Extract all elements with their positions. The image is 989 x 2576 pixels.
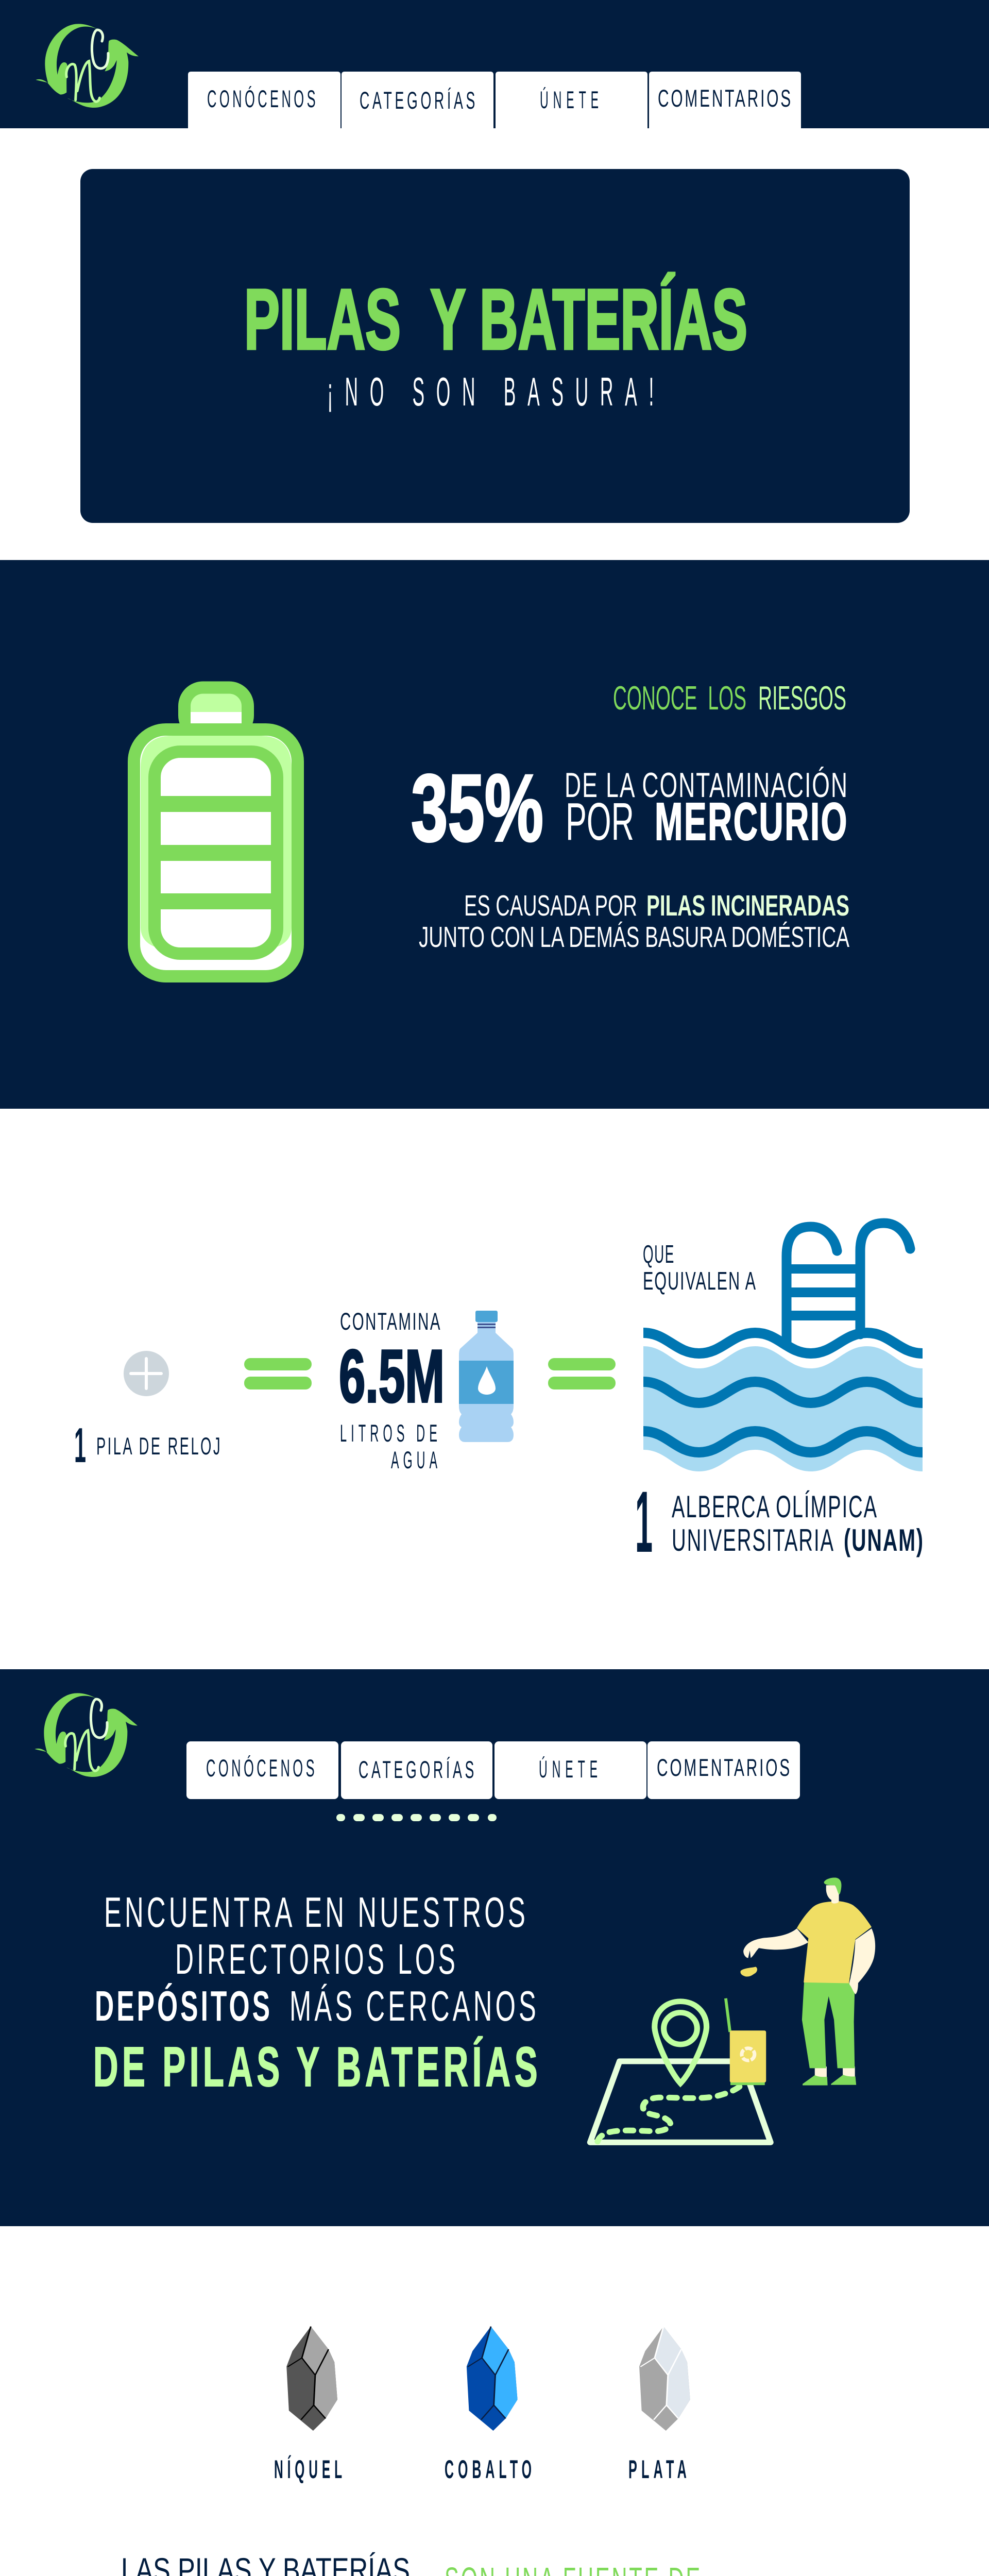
- icon: logo with recycling arrows: [36, 24, 139, 108]
- icon: watch battery: [124, 1351, 169, 1396]
- panel: hero title: [80, 169, 910, 523]
- text: que equivalen a: EQUIVALEN A: [643, 1267, 757, 1295]
- panel: equivalence: [74, 1223, 924, 1570]
- recycling bin: [726, 1998, 766, 2085]
- icon: silver crystal: [639, 2327, 690, 2431]
- text: pilas incineradas: PILAS INCINERADAS: [646, 889, 849, 922]
- text: encuentra depósitos: ENCUENTRA EN NUESTROS: [104, 1888, 528, 1936]
- panel: directory: [0, 1669, 989, 2226]
- label: 1 alberca olímpica: (UNAM): [844, 1523, 924, 1557]
- text: encuentra depósitos: DIRECTORIOS LOS: [175, 1935, 458, 1983]
- stat: 35 percent: 35%: [411, 755, 543, 861]
- materials row: [274, 2327, 691, 2484]
- text: encuentra depósitos: MÁS CERCANOS: [289, 1982, 539, 2030]
- navigation tabs: [188, 72, 801, 128]
- label: 1 pila de reloj: 1: [74, 1418, 86, 1473]
- materials row: COBALTO: [445, 2455, 536, 2484]
- stat: 6.5M litros: AGUA: [391, 1446, 441, 1473]
- icon: logo: [35, 1693, 138, 1777]
- label: 1 alberca olímpica: ALBERCA OLÍMPICA: [672, 1489, 878, 1524]
- label: 1 pila de reloj: [74, 1418, 222, 1473]
- heading: conoce los riesgos: CONOCE LOS: [613, 679, 746, 717]
- illustration: person recycling over map: [590, 1877, 875, 2142]
- label: plata: PLATA: [628, 2455, 691, 2484]
- label: 1 alberca olímpica: UNIVERSITARIA: [672, 1523, 834, 1557]
- equals sign: [244, 1358, 312, 1389]
- route: [598, 2084, 743, 2142]
- heading: conoce los riesgos: RIESGOS: [758, 679, 846, 717]
- person: [740, 1877, 875, 2086]
- location pin: [655, 2002, 707, 2083]
- panel: risks: [0, 560, 989, 1109]
- materials row: NÍQUEL: [274, 2455, 346, 2484]
- stat: 35 percent: [411, 755, 848, 861]
- icon: water bottle: [459, 1311, 514, 1442]
- panel: top header: [0, 0, 989, 128]
- text: encuentra depósitos: DE PILAS Y BATERÍAS: [93, 2036, 541, 2098]
- equals sign: [548, 1358, 616, 1389]
- icon: battery: [134, 687, 298, 976]
- map: [590, 2061, 771, 2142]
- stat: 35 percent: DE LA CONTAMINACIÓN: [565, 766, 848, 805]
- icon: nickel crystal: [286, 2327, 337, 2431]
- stat: 6.5M litros: CONTAMINA: [340, 1308, 441, 1335]
- label: 1 pila de reloj: PILA DE RELOJ: [96, 1432, 222, 1460]
- stat: 6.5M litros: 6.5M: [339, 1334, 445, 1418]
- text: encuentra depósitos: [93, 1888, 541, 2098]
- stat: 6.5M litros: LITROS DE: [340, 1419, 441, 1447]
- label: 1 alberca olímpica: [635, 1473, 924, 1570]
- navigation buttons: [186, 1741, 800, 1799]
- text: que equivalen a: QUE: [643, 1241, 675, 1268]
- text: pilas incineradas: ES CAUSADA POR: [464, 889, 637, 922]
- text: que equivalen a: [643, 1241, 757, 1295]
- stat: 35 percent: MERCURIO: [655, 792, 848, 851]
- stat: 35 percent: POR: [566, 792, 634, 851]
- icon: cobalt crystal: [467, 2327, 518, 2431]
- stat: 6.5M litros: [339, 1308, 445, 1473]
- label: 1 alberca olímpica: 1: [635, 1473, 653, 1570]
- icon: swimming pool: [643, 1223, 923, 1471]
- text: encuentra depósitos: DEPÓSITOS: [95, 1982, 272, 2030]
- active tab dotted indicator: [336, 1814, 497, 1821]
- text: pilas incineradas: [419, 889, 849, 954]
